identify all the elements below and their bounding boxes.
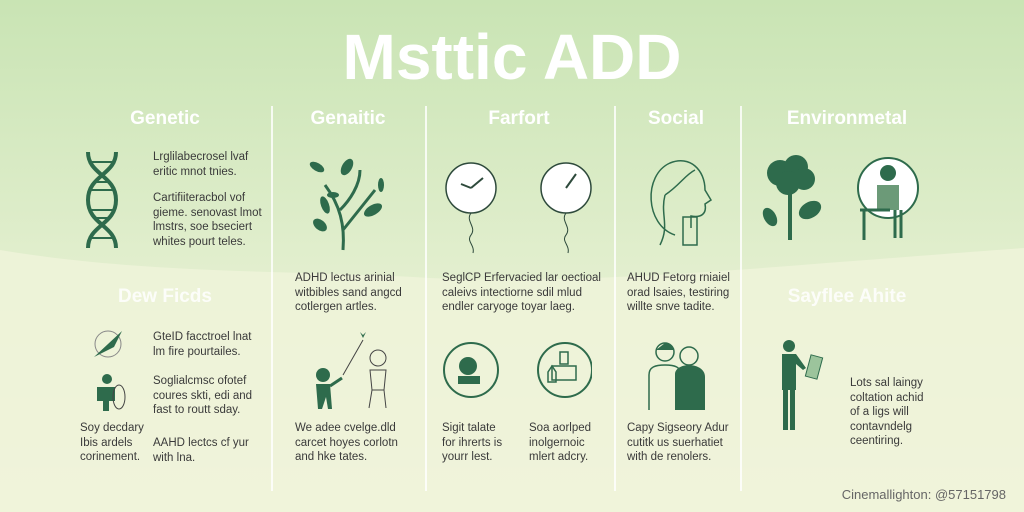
text: farfort 2: Sigit talate: [442, 422, 496, 434]
icon: brain sun: [94, 330, 122, 358]
text: genetic 1: Lrglilabecrosel lvaf: [153, 151, 248, 163]
text: environmental: Lots sal laingy: [850, 377, 923, 389]
heading: genetic: Genetic: [130, 108, 200, 129]
text: social 1: [627, 272, 730, 313]
text: social 2: Capy Sigseory Adur: [627, 422, 729, 434]
heading: sayflee ahite: Sayflee Ahite: [788, 286, 906, 307]
text: environmental: contavndelg: [850, 420, 912, 432]
text: farfort 3: inolgernoic: [529, 436, 585, 448]
icon: dna: [86, 152, 118, 248]
icon: plant: [310, 158, 384, 250]
text: dew 2: fast to routt sday.: [153, 404, 240, 416]
text: dew 2: [153, 375, 252, 416]
text: genaitic 2: carcet hoyes corlotn: [295, 436, 398, 448]
heading: genaitic: Genaitic: [310, 108, 385, 129]
text: farfort 2: [442, 422, 502, 463]
icon: person in circle: [857, 157, 919, 240]
text: farfort 3: [529, 422, 591, 463]
text: genaitic 1: witbibles sand angcd: [295, 286, 402, 298]
text: farfort 1: caleivs intectiorne sdil mlud: [442, 286, 582, 298]
text: genaitic 1: ADHD lectus arinial: [295, 272, 395, 284]
text: dew 2: Soglialcmsc ofotef: [153, 375, 246, 387]
heading: environmental: Environmetal: [787, 108, 907, 129]
text: genetic 2: lmstrs, soe bseciert: [153, 221, 252, 233]
icon: couple: [648, 342, 705, 410]
text: genaitic 1: [295, 272, 402, 313]
text: dew 4: AAHD lectcs cf yur: [153, 437, 249, 449]
heading: social: Social: [648, 108, 704, 129]
text: environmental: ceentiring.: [850, 435, 903, 447]
text: dew 2: coures skti, edi and: [153, 390, 252, 402]
text: farfort 1: SeglCP Erfervacied lar oectioal: [442, 272, 601, 284]
text: genetic 1: [153, 151, 248, 178]
icon: tree: [762, 155, 822, 240]
text: genaitic 2: [295, 422, 398, 463]
text: genaitic 1: cotlergen artles.: [295, 301, 377, 313]
icon: person with tablet: [782, 340, 824, 430]
text: dew 1: GteID facctroel lnat: [153, 331, 251, 343]
text: social 2: [627, 422, 729, 463]
text: genaitic 2: We adee cvelge.dld: [295, 422, 396, 434]
text: dew 4: with lna.: [153, 452, 195, 464]
text: farfort 2: yourr lest.: [442, 451, 492, 463]
text: environmental: coltation achid: [850, 392, 924, 404]
text: environmental: [850, 377, 924, 447]
text: genetic 2: Cartifiiteracbol vof: [153, 192, 245, 204]
text: social 1: willte snve tadite.: [627, 301, 715, 313]
text: genetic 2: whites pourt teles.: [153, 236, 246, 248]
text: social 2: cutitk us suerhatiet: [627, 436, 723, 448]
title: Msttic ADD: [343, 21, 681, 93]
text: genetic 2: [153, 192, 262, 248]
icon: clocks: [445, 162, 592, 254]
text: genetic 1: eritic mnot tnies.: [153, 166, 237, 178]
text: dew 1: [153, 331, 252, 358]
text: dew 3: [80, 422, 144, 463]
text: farfort 3: Soa aorlped: [529, 422, 591, 434]
footer credit: Cinemallighton: @57151798: [842, 487, 1006, 502]
text: dew 1: lm fire pourtailes.: [153, 346, 241, 358]
text: genetic 2: gieme. senovast lmot: [153, 206, 262, 218]
text: farfort 1: [442, 272, 601, 313]
text: dew 3: Soy decdary: [80, 422, 144, 434]
text: environmental: of a ligs will: [850, 406, 909, 418]
text: social 1: orad lsaies, testiring: [627, 286, 729, 298]
text: genaitic 2: and hke tates.: [295, 451, 367, 463]
text: farfort 2: for ihrerts is: [442, 436, 502, 448]
text: dew 3: corinement.: [80, 451, 140, 463]
text: dew 3: Ibis ardels: [80, 436, 132, 448]
text: social 2: with de renolers.: [627, 451, 711, 463]
icon: circle icons: [443, 342, 592, 398]
text: dew 4: [153, 437, 249, 464]
text: farfort 1: endler caryoge toyar laeg.: [442, 301, 575, 313]
heading: farfort: Farfort: [488, 108, 550, 129]
icon: person: [97, 374, 126, 411]
icon: children: [316, 332, 387, 409]
text: farfort 3: mlert adcry.: [529, 451, 588, 463]
icon: head: [650, 160, 712, 246]
heading: dew ficds: Dew Ficds: [118, 286, 212, 307]
text: social 1: AHUD Fetorg rniaiel: [627, 272, 730, 284]
